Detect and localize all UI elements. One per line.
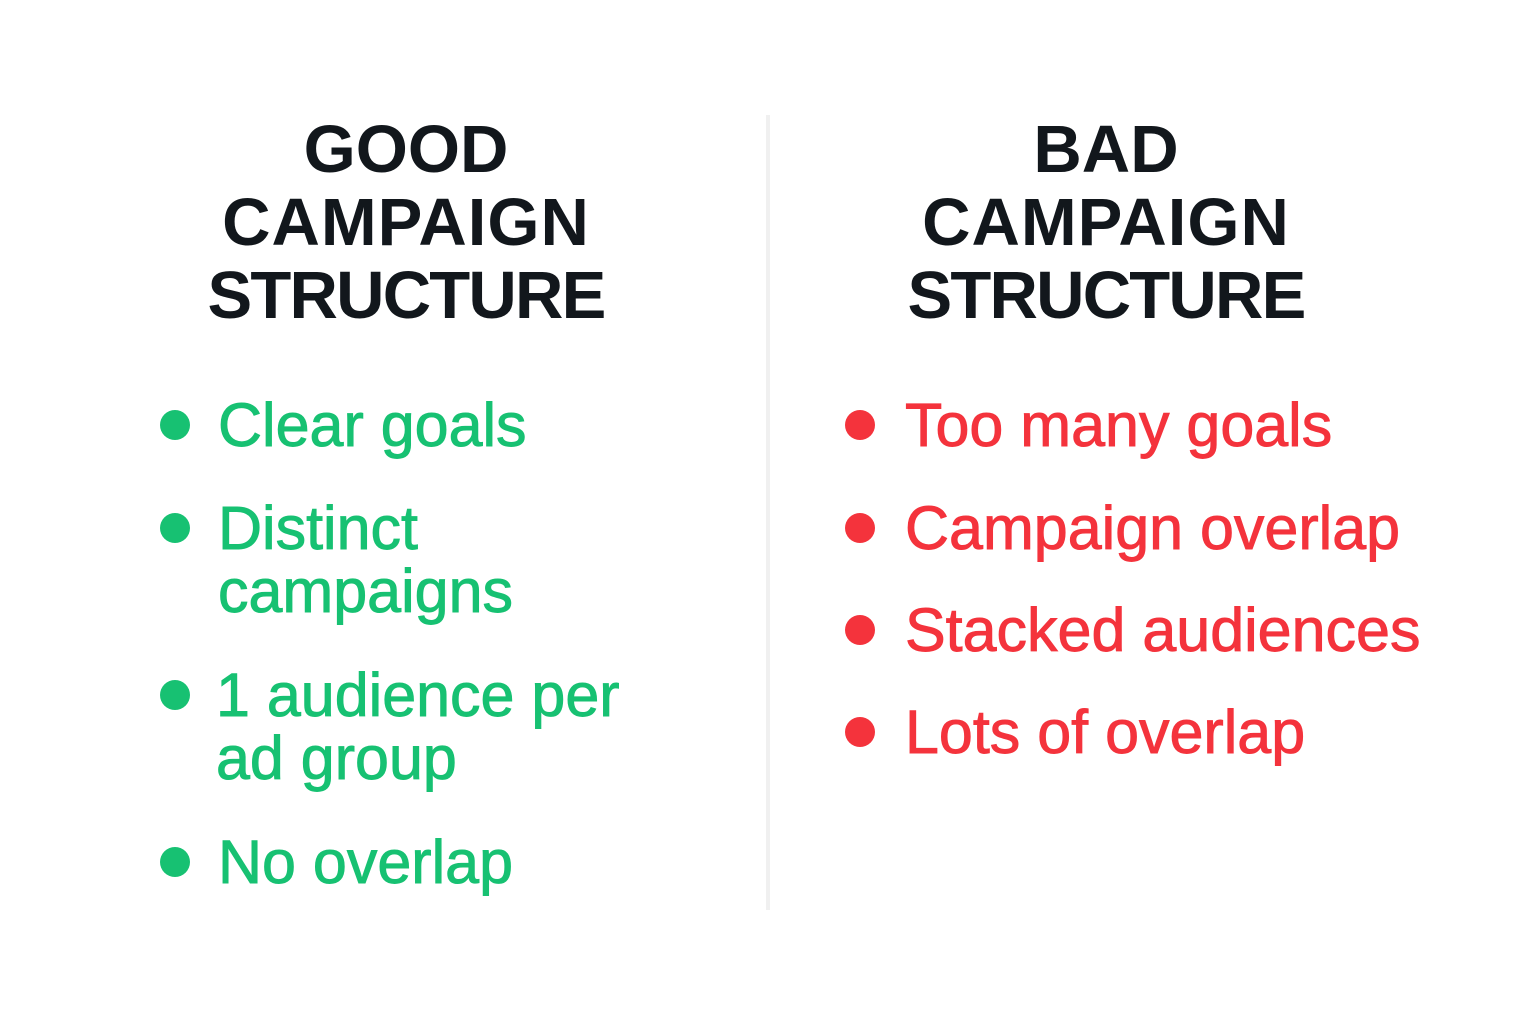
item: lots of overlap: Lots of overlap xyxy=(905,698,1305,766)
title: bad: BAD xyxy=(1033,112,1179,187)
item: too many goals: Too many goals xyxy=(905,391,1332,459)
list: bad xyxy=(845,391,1420,766)
item: 1 audience per ad group xyxy=(216,661,620,792)
item: 1 audience per ad group: 1 audience per xyxy=(216,661,620,729)
item: distinct campaigns: campaigns xyxy=(218,557,513,625)
bullet dot xyxy=(160,847,190,877)
bullet dot xyxy=(160,410,190,440)
item: clear goals: Clear goals xyxy=(218,391,527,459)
item: 1 audience per ad group: ad group xyxy=(216,724,457,792)
title: bad: CAMPAIGN xyxy=(922,185,1290,260)
bullet dot xyxy=(845,717,875,747)
bullet dot xyxy=(845,513,875,543)
item: no overlap: No overlap xyxy=(218,828,513,896)
bullet dot xyxy=(845,615,875,645)
title: bad: STRUCTURE xyxy=(908,258,1304,333)
bullet dot xyxy=(160,680,190,710)
item: campaign overlap: Campaign overlap xyxy=(905,494,1400,562)
title: good: GOOD xyxy=(304,112,508,187)
item: stacked audiences: Stacked audiences xyxy=(905,596,1420,664)
title: good: STRUCTURE xyxy=(208,258,604,333)
bullet dot xyxy=(845,410,875,440)
title: bad xyxy=(908,112,1304,333)
item: distinct campaigns xyxy=(218,494,513,625)
bullet dot xyxy=(160,513,190,543)
list: good xyxy=(160,391,620,896)
divider xyxy=(766,115,770,910)
title: good: CAMPAIGN xyxy=(222,185,590,260)
item: distinct campaigns: Distinct xyxy=(218,494,418,562)
title: good xyxy=(208,112,604,333)
